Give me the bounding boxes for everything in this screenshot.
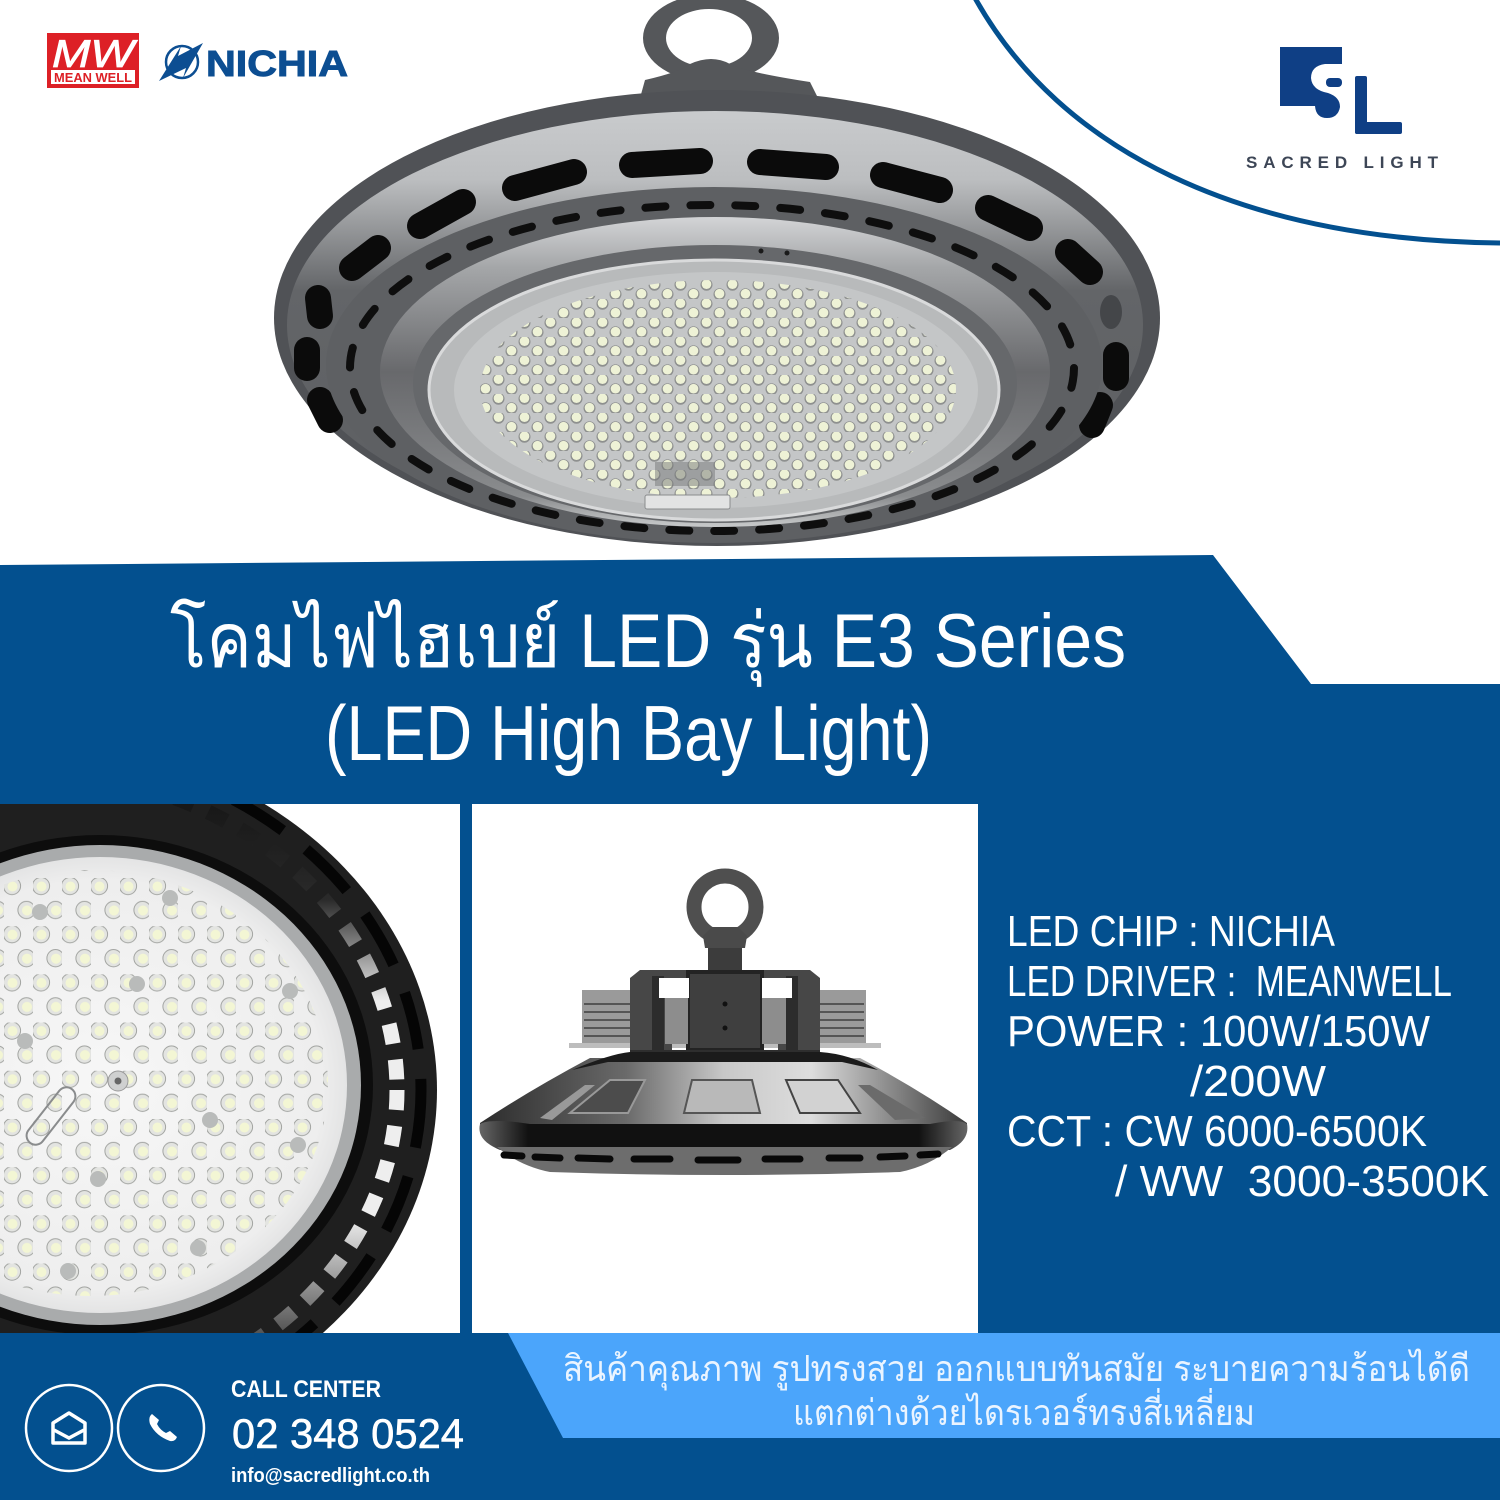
LED array: [0, 870, 328, 1296]
logo: Nichia: [159, 43, 348, 84]
icon: phone: [118, 1385, 204, 1471]
lens rim: [0, 845, 361, 1325]
specification list: CCT : CW 6000-6500K: [1007, 1107, 1427, 1156]
LED array: [480, 280, 956, 498]
icon: envelope: [26, 1385, 112, 1471]
inner ring: [0, 835, 373, 1335]
LED modules: [17, 890, 306, 1279]
specification list: / WW 3000-3500K: [1115, 1157, 1489, 1206]
contact text: [231, 1376, 464, 1487]
inner grey ring with small slots: [326, 187, 1102, 543]
rim slots: [504, 1154, 938, 1160]
blue background panel: [0, 555, 1500, 1500]
specification list: /200W: [1190, 1057, 1326, 1106]
contact text: CALL CENTER: [231, 1376, 381, 1403]
light blue banner: แตกต่างด้วยไดรเวอร์ทรงสี่เหลี่ยม: [793, 1388, 1255, 1433]
photo panel: lamp side view: [472, 804, 978, 1333]
top right arc: [975, 0, 1500, 243]
sensor port: [1100, 295, 1122, 329]
contact text: 02 348 0524: [232, 1410, 464, 1457]
title line 1: โคมไฟไฮเบย์ LED รุ่น E3 Series: [170, 598, 1126, 687]
dish panels: [540, 1080, 925, 1120]
photo panel: lamp close-up: [0, 804, 460, 1333]
logo: Mean Well: MW: [52, 33, 138, 76]
specification list: [1007, 907, 1489, 1206]
hanging ring: [643, 0, 779, 82]
dish: [480, 1058, 967, 1130]
logo: Mean Well: [47, 33, 139, 88]
contact text: info@sacredlight.co.th: [231, 1465, 430, 1487]
light blue banner: [508, 1333, 1500, 1438]
bracket: [630, 970, 820, 1050]
logo: Mean Well: MEAN WELL: [54, 70, 132, 85]
silver vented band: [287, 111, 1143, 539]
lower rim: [497, 1147, 952, 1175]
eye bolt: [694, 876, 756, 938]
fin boxes: [569, 1043, 881, 1048]
outer housing: [274, 90, 1160, 546]
logo: Nichia: NICHIA: [206, 43, 348, 84]
specification list: POWER : 100W/150W: [1007, 1007, 1430, 1056]
inner cone: [380, 217, 1050, 527]
screw holes: [758, 248, 790, 256]
large vent slots: [307, 161, 1116, 425]
lens clip: [26, 1086, 76, 1146]
logo: Sacred Light: SACRED LIGHT: [1246, 153, 1439, 172]
title line 2: (LED High Bay Light): [325, 689, 932, 777]
main product photo: UFO high bay lamp: [274, 0, 1160, 546]
lens plate: [0, 857, 347, 1313]
lens: [429, 260, 999, 520]
logo: Sacred Light: [1246, 47, 1439, 172]
specification list: LED CHIP : NICHIA: [1007, 907, 1336, 956]
through vents: [254, 884, 404, 1333]
outer oval slots: [231, 804, 426, 1333]
black housing: [0, 804, 437, 1333]
centre sensor: [108, 1071, 128, 1091]
black band: [479, 1121, 967, 1150]
